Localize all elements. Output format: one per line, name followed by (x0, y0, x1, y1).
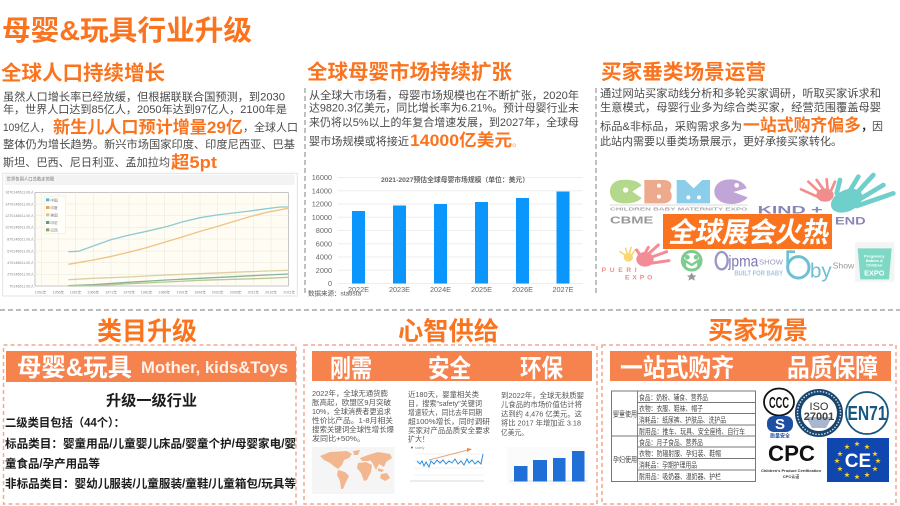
table: purchase use (612, 391, 756, 482)
banner: one stop and quality: 一站式购齐 (620, 354, 734, 382)
text block: category list: 童食品/孕产用品等 (5, 456, 100, 470)
bar chart: market size: 16000 (312, 173, 332, 182)
table: purchase use: 耐用品：推车、玩具、安全座椅、自行车 (639, 427, 745, 436)
text block: market description: 14000亿美元 (410, 130, 512, 150)
icon: CPC certification: CPC认证 (783, 473, 799, 479)
table: purchase use: 衣物：衣服、鞋袜、帽子 (639, 404, 703, 413)
icon: CBME logo: CBME (610, 216, 654, 227)
line chart: population trend: 1670146511.00人 (5, 189, 34, 194)
text block: buyer description: ， (861, 121, 872, 133)
text block: population description: 斯坦、巴西、尼日利亚、孟加拉均 (3, 155, 170, 169)
panel: global population (1, 61, 298, 296)
icon: baby show logo: Show (833, 261, 855, 271)
text block: population description: 整体仍为增长趋势。新兴市场国家印度、印度尼西亚、巴基 (3, 137, 295, 151)
table: purchase use: 婴童使用 (613, 410, 637, 418)
text block: buyer description: 因 (872, 120, 883, 133)
text block: category list: 升级一级行业 (106, 392, 197, 410)
bar chart: market size: 14000 (312, 186, 332, 196)
line chart: population trend: 1961年 (70, 289, 82, 294)
icon: jpma show logo: jpma (727, 254, 759, 271)
bar chart: gluten free value (507, 447, 588, 484)
icon: jpma show logo (716, 252, 784, 277)
text block: buyer description: 标品&非标品，采购需求多为 (600, 119, 742, 133)
icon: jpma show logo: SHOW (759, 257, 784, 266)
banner: mother kids toys (6, 351, 296, 382)
text block: buyer description: 通过网站买家动线分析和多轮买家调研，听取买家诉求和 (600, 86, 881, 100)
line chart: population trend: 1991年 (176, 289, 189, 294)
line chart: population trend: 2001年 (212, 289, 224, 294)
icon: pregnancy expo box: Pregnancy (864, 253, 885, 258)
table: purchase use: 耐用品：吸奶器、温奶器、护栏 (639, 472, 721, 481)
icon: CPC certification (761, 441, 822, 479)
line chart: population trend: 1986年 (158, 289, 171, 294)
banner: need safety eco: 刚需 (330, 355, 372, 383)
heading: global population: 全球人口持续增长 (1, 61, 165, 85)
text block: category list (5, 392, 297, 490)
banner: one stop and quality: 品质保障 (787, 354, 878, 382)
text block: market description (309, 88, 579, 150)
bar chart: market size: 2022E (348, 285, 369, 294)
text block: market description: 来仍将以5%以上的年复合增速发展，到2027年，全球母 (309, 115, 579, 129)
panel: global market (307, 60, 583, 298)
icon: ISO 27001 badge (798, 392, 840, 434)
icon: pueri expo logo: PUERI (602, 267, 637, 274)
line chart: population trend: 世界各国人口总数走势图 (7, 175, 54, 182)
text block: eco column: 亿美元。 (501, 428, 528, 437)
banner: one stop and quality (610, 351, 891, 382)
icon: CPC certification: Children's Product Certification (761, 468, 822, 473)
text block: need column: 发同比+50%。 (312, 434, 365, 443)
line chart: safety keyword trend (408, 445, 485, 484)
icon: CE flag: ★ (875, 458, 881, 465)
icon: pueri expo logo (602, 245, 669, 281)
text block: safety column: 扩大！ (408, 434, 429, 444)
line chart: population trend: 2006年 (230, 289, 242, 294)
text block: population description: 109亿人， (3, 121, 50, 134)
text block: category list: 二级类目包括（44个）： (5, 416, 125, 430)
bar chart: market size: 2027E (552, 285, 574, 294)
icon: pregnancy expo box: EXPO (864, 268, 885, 277)
line chart: population trend: 1976年 (123, 289, 135, 294)
icon: CCC mark: CCC (769, 395, 789, 412)
line chart: population trend: 巴西 (50, 227, 58, 232)
bar chart: market size: 0 (328, 279, 332, 288)
text block: category list: 非标品类目：婴幼儿服装/儿童服装/童鞋/儿童箱包/玩具等 (5, 476, 297, 490)
icon: ISO 27001 badge: ISO (810, 401, 829, 413)
icon: CE flag: ★ (854, 474, 860, 481)
line chart: population trend: 870146511.00人 (7, 236, 34, 241)
banner: mother kids toys: Mother, kids&Toys (141, 359, 288, 377)
line chart: population trend: 2011年 (248, 289, 259, 294)
callout: global expo banner: 全球展会火热 (667, 216, 833, 248)
banner: need safety eco: 安全 (428, 355, 471, 383)
line chart: population trend: 1951年 (35, 289, 47, 294)
table: purchase use: 食品：月子食品、营养品 (639, 438, 703, 447)
text block: need column: 性价比产品。1-8月相关 (312, 416, 393, 425)
text block: buyer description (600, 86, 883, 148)
line chart: population trend: 1971年 (105, 289, 117, 294)
line chart: population trend: 1470146511.00人 (5, 201, 34, 206)
text block: population description: 年，世界人口达到85亿人，2050年达到97亿人，2100年是 (3, 102, 287, 116)
icon: pregnancy expo box (855, 242, 894, 282)
text block: safety column (408, 390, 491, 444)
icon: baby show logo (788, 252, 855, 282)
icon: world map (312, 447, 394, 494)
icon: CE flag: ★ (844, 472, 850, 479)
heading: global market: 全球母婴市场持续扩张 (307, 60, 512, 84)
bar chart: market size: 2024E (430, 285, 451, 294)
panel: category upgrade (4, 318, 297, 504)
line chart: population trend: 印度 (50, 205, 58, 210)
text block: safety column: 近180天，婴童相关类 (408, 390, 480, 399)
icon: CE flag: ★ (837, 466, 843, 473)
icon: CE flag: ★ (844, 444, 850, 451)
text block: population description: 超5pt (171, 153, 217, 172)
icon: CBME logo (610, 179, 748, 227)
logos: expo logos (602, 175, 894, 282)
text block: safety column: 增速较大，同比去年同期 (408, 408, 482, 417)
icon: CPC certification: CPC (768, 441, 815, 466)
icon: circular green logo (682, 251, 701, 281)
line chart: population trend: 1270146511.00人 (5, 213, 34, 218)
icon: CE flag: ★ (834, 458, 840, 465)
bar chart: market size: 2025E (471, 285, 492, 294)
icon: CE flag (827, 438, 889, 482)
line chart: population trend: 670146511.00人 (7, 248, 34, 253)
icon: kind and friend logo: KIND + (758, 204, 823, 216)
icon: EN71 badge (846, 392, 888, 434)
icon: CBME logo: CHILDREN BABY MATERNITY EXPO (610, 207, 748, 212)
line chart: population trend: 270146511.00人 (7, 272, 34, 277)
icon: CE flag: ★ (864, 472, 870, 479)
text block: population description: ，全球人口 (243, 120, 298, 134)
line chart: population trend: 70146511.00人 (9, 283, 34, 288)
icon: pueri expo logo: EXPO (625, 274, 652, 281)
text block: safety column: 买家对产品品质安全要求 (408, 426, 491, 435)
icon: CE flag: ★ (864, 444, 870, 451)
text block: market description: 达9820.3亿美元，同比增长率为6.21%。预计母婴行业未 (309, 100, 579, 114)
line chart: population trend (3, 173, 297, 296)
text block: market description: 婴市场规模或将接近 (309, 134, 409, 148)
line chart: population trend: 1956年 (52, 289, 65, 294)
table: purchase use: 孕妇使用 (613, 455, 637, 464)
icon: baby show logo: by (810, 260, 832, 282)
bar chart: market size: 6000 (316, 240, 332, 248)
bar chart: market size: 2026E (512, 285, 533, 294)
bar chart: market size (308, 173, 583, 298)
panel: buyer vertical scenes (600, 60, 894, 282)
title: 母婴&玩具行业升级 (2, 15, 252, 46)
heading: category upgrade: 类目升级 (97, 318, 197, 346)
line chart: population trend: 美国 (50, 212, 58, 217)
text block: eco column: 儿食品的市场价值估计将 (501, 400, 582, 409)
line chart: population trend: 470146511.00人 (7, 260, 34, 265)
bar chart: market size: 4000 (316, 252, 332, 262)
line chart: population trend: 2016年 (265, 289, 277, 294)
banner: mother kids toys: 母婴&玩具 (17, 354, 132, 382)
line chart: population trend: 2021年 (283, 289, 296, 294)
heading: buyer scene: 买家场景 (708, 317, 808, 345)
line chart: population trend: 1966年 (87, 289, 100, 294)
icon: kind and friend logo: END (835, 215, 866, 227)
line chart: population trend: 1070146511.00人 (5, 225, 34, 230)
text block: safety column: 超100%增长，同时调研 (408, 417, 490, 426)
icon: pregnancy expo box: Babies & (866, 258, 883, 263)
banner: need safety eco: 环保 (520, 355, 563, 383)
icon: CE flag: ★ (854, 441, 860, 448)
icon: S quality mark (767, 416, 793, 440)
panel: mindshare supply (304, 318, 597, 504)
text block: market description: 。 (512, 137, 523, 149)
text block: need column: 搜索关键词全球性增长爆 (312, 425, 395, 434)
text block: population description: 虽然人口增长率已经放缓，但根据联联合国预测，到2030 (3, 90, 285, 104)
icon: kind and friend logo (758, 175, 893, 227)
text block: need column (312, 389, 395, 443)
text block: buyer description: 一站式购齐偏多 (743, 115, 861, 135)
text block: eco column: 将比 2017 年增加近 3.18 (501, 418, 581, 428)
bar chart: market size: 2023E (389, 285, 410, 294)
icon: CCC mark (764, 388, 794, 416)
table: purchase use: 食品：奶粉、辅食、营养品 (639, 393, 708, 402)
icon: jpma show logo: BUILT FOR BABY (734, 270, 783, 277)
text block: safety column: 目，搜索"safety"关键词 (408, 399, 482, 408)
icon: EN71 badge: EN71 (848, 403, 886, 425)
text block: eco column (501, 391, 584, 437)
icon: S quality mark: S (775, 416, 785, 433)
heading: mindshare supply: 心智供给 (398, 318, 499, 346)
line chart: population trend: 1981年 (141, 289, 153, 294)
bar chart: market size: 2021-2027预估全球母婴市场规模（单位：美元） (381, 175, 529, 184)
line chart: population trend: 中国 (50, 197, 58, 202)
icon: CE flag: ★ (872, 451, 878, 458)
icon: CE flag: ★ (872, 466, 878, 473)
banner: need safety eco (312, 351, 592, 383)
text block: population description (3, 90, 298, 172)
text block: need column: 胀高起，欧盟区9月突破 (312, 398, 391, 407)
bar chart: market size: 数据来源：statista (308, 288, 361, 298)
text block: need column: 10%，全球消费者更追求 (312, 407, 392, 416)
icon: CE flag: ★ (837, 451, 843, 458)
text block: eco column: 到2022年，全球无麸质婴 (501, 391, 584, 400)
line chart: population trend: 1996年 (194, 289, 206, 294)
table: purchase use: 衣物：防辐射服、孕妇装、鞋帽 (639, 449, 721, 458)
heading: buyer vertical scenes: 买家垂类场景运营 (601, 60, 766, 84)
bar chart: market size: 8000 (316, 226, 332, 235)
table: purchase use: 消耗品：纸尿裤、护肤品、洗护品 (639, 416, 726, 424)
text block: population description: 新生儿人口预计增量29亿 (53, 117, 243, 137)
line chart: population trend: 印尼 (50, 220, 58, 225)
text block: buyer description: 此站内需要以垂类场景展示，更好承接买家转化。 (600, 134, 842, 148)
bar chart: market size: 12000 (312, 200, 332, 208)
icon: CE flag: CE (845, 451, 871, 472)
text block: category list: 标品类目：婴童用品/儿童婴儿床品/婴童个护/母婴家电/婴 (5, 436, 296, 450)
bar chart: market size: 10000 (312, 213, 332, 222)
icon: S quality mark: 质量安全 (770, 432, 790, 440)
line chart: safety keyword trend: safety (415, 446, 425, 450)
text block: market description: 从全球大市场看，母婴市场规模也在不断扩张，2020年 (309, 88, 579, 102)
panel: buyer scene (602, 317, 896, 504)
bar chart: market size: 2000 (316, 266, 332, 275)
text block: buyer description: 生意模式，母婴行业多为综合类买家，经营范围覆盖母婴 (600, 100, 881, 114)
icon: ISO 27001 badge: 27001 (804, 411, 834, 423)
text block: eco column: 达到约 4,476 亿美元。这 (501, 410, 583, 418)
icon: pregnancy expo box: Children (866, 263, 883, 268)
text block: need column: 2022年，全球无通货膨 (312, 389, 388, 398)
table: purchase use: 消耗品：孕期护理用品 (639, 460, 697, 470)
